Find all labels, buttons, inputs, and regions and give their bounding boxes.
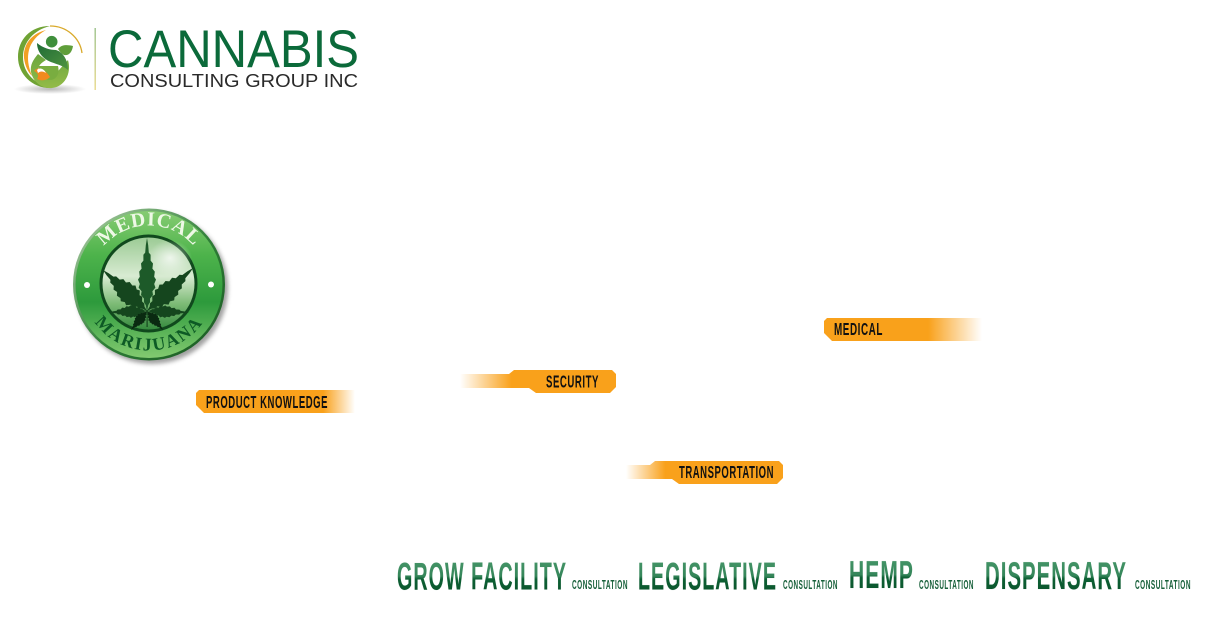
label: SECURITY: SECURITY [546,372,599,392]
logo: Cannabis Consulting Group [14,20,359,94]
label: SECURITY [460,370,616,393]
label: PRODUCT KNOWLEDGE: PRODUCT KNOWLEDGE [206,392,328,412]
label: MEDICAL [824,318,982,341]
badge text: MEDICAL: MEDICAL [95,212,198,246]
service: Grow Facility consultation: CONSULTATION [572,578,628,592]
label: MEDICAL: MEDICAL [834,319,883,339]
icon: logo emblem [14,26,86,94]
service: Legislative consultation: LEGISLATIVE [638,556,777,598]
service: Grow Facility consultation: GROW FACILITY [397,556,567,598]
badge text: MARIJUANA: MARIJUANA [94,314,202,351]
label: TRANSPORTATION [626,461,783,484]
logo wordmark: CANNABIS [108,20,359,79]
label: TRANSPORTATION: TRANSPORTATION [679,462,774,482]
service: Hemp consultation: HEMP [849,554,914,597]
icon: cannabis leaf [96,238,200,334]
service: Grow Facility consultation [397,556,628,598]
badge: Medical Marijuana seal [73,208,231,367]
divider line [94,28,96,90]
badge dots [84,282,214,288]
service: Hemp consultation: CONSULTATION [919,578,974,592]
service: Legislative consultation: CONSULTATION [783,578,838,592]
label: PRODUCT KNOWLEDGE [196,390,355,413]
logo subtitle: CONSULTING GROUP INC [110,70,358,91]
